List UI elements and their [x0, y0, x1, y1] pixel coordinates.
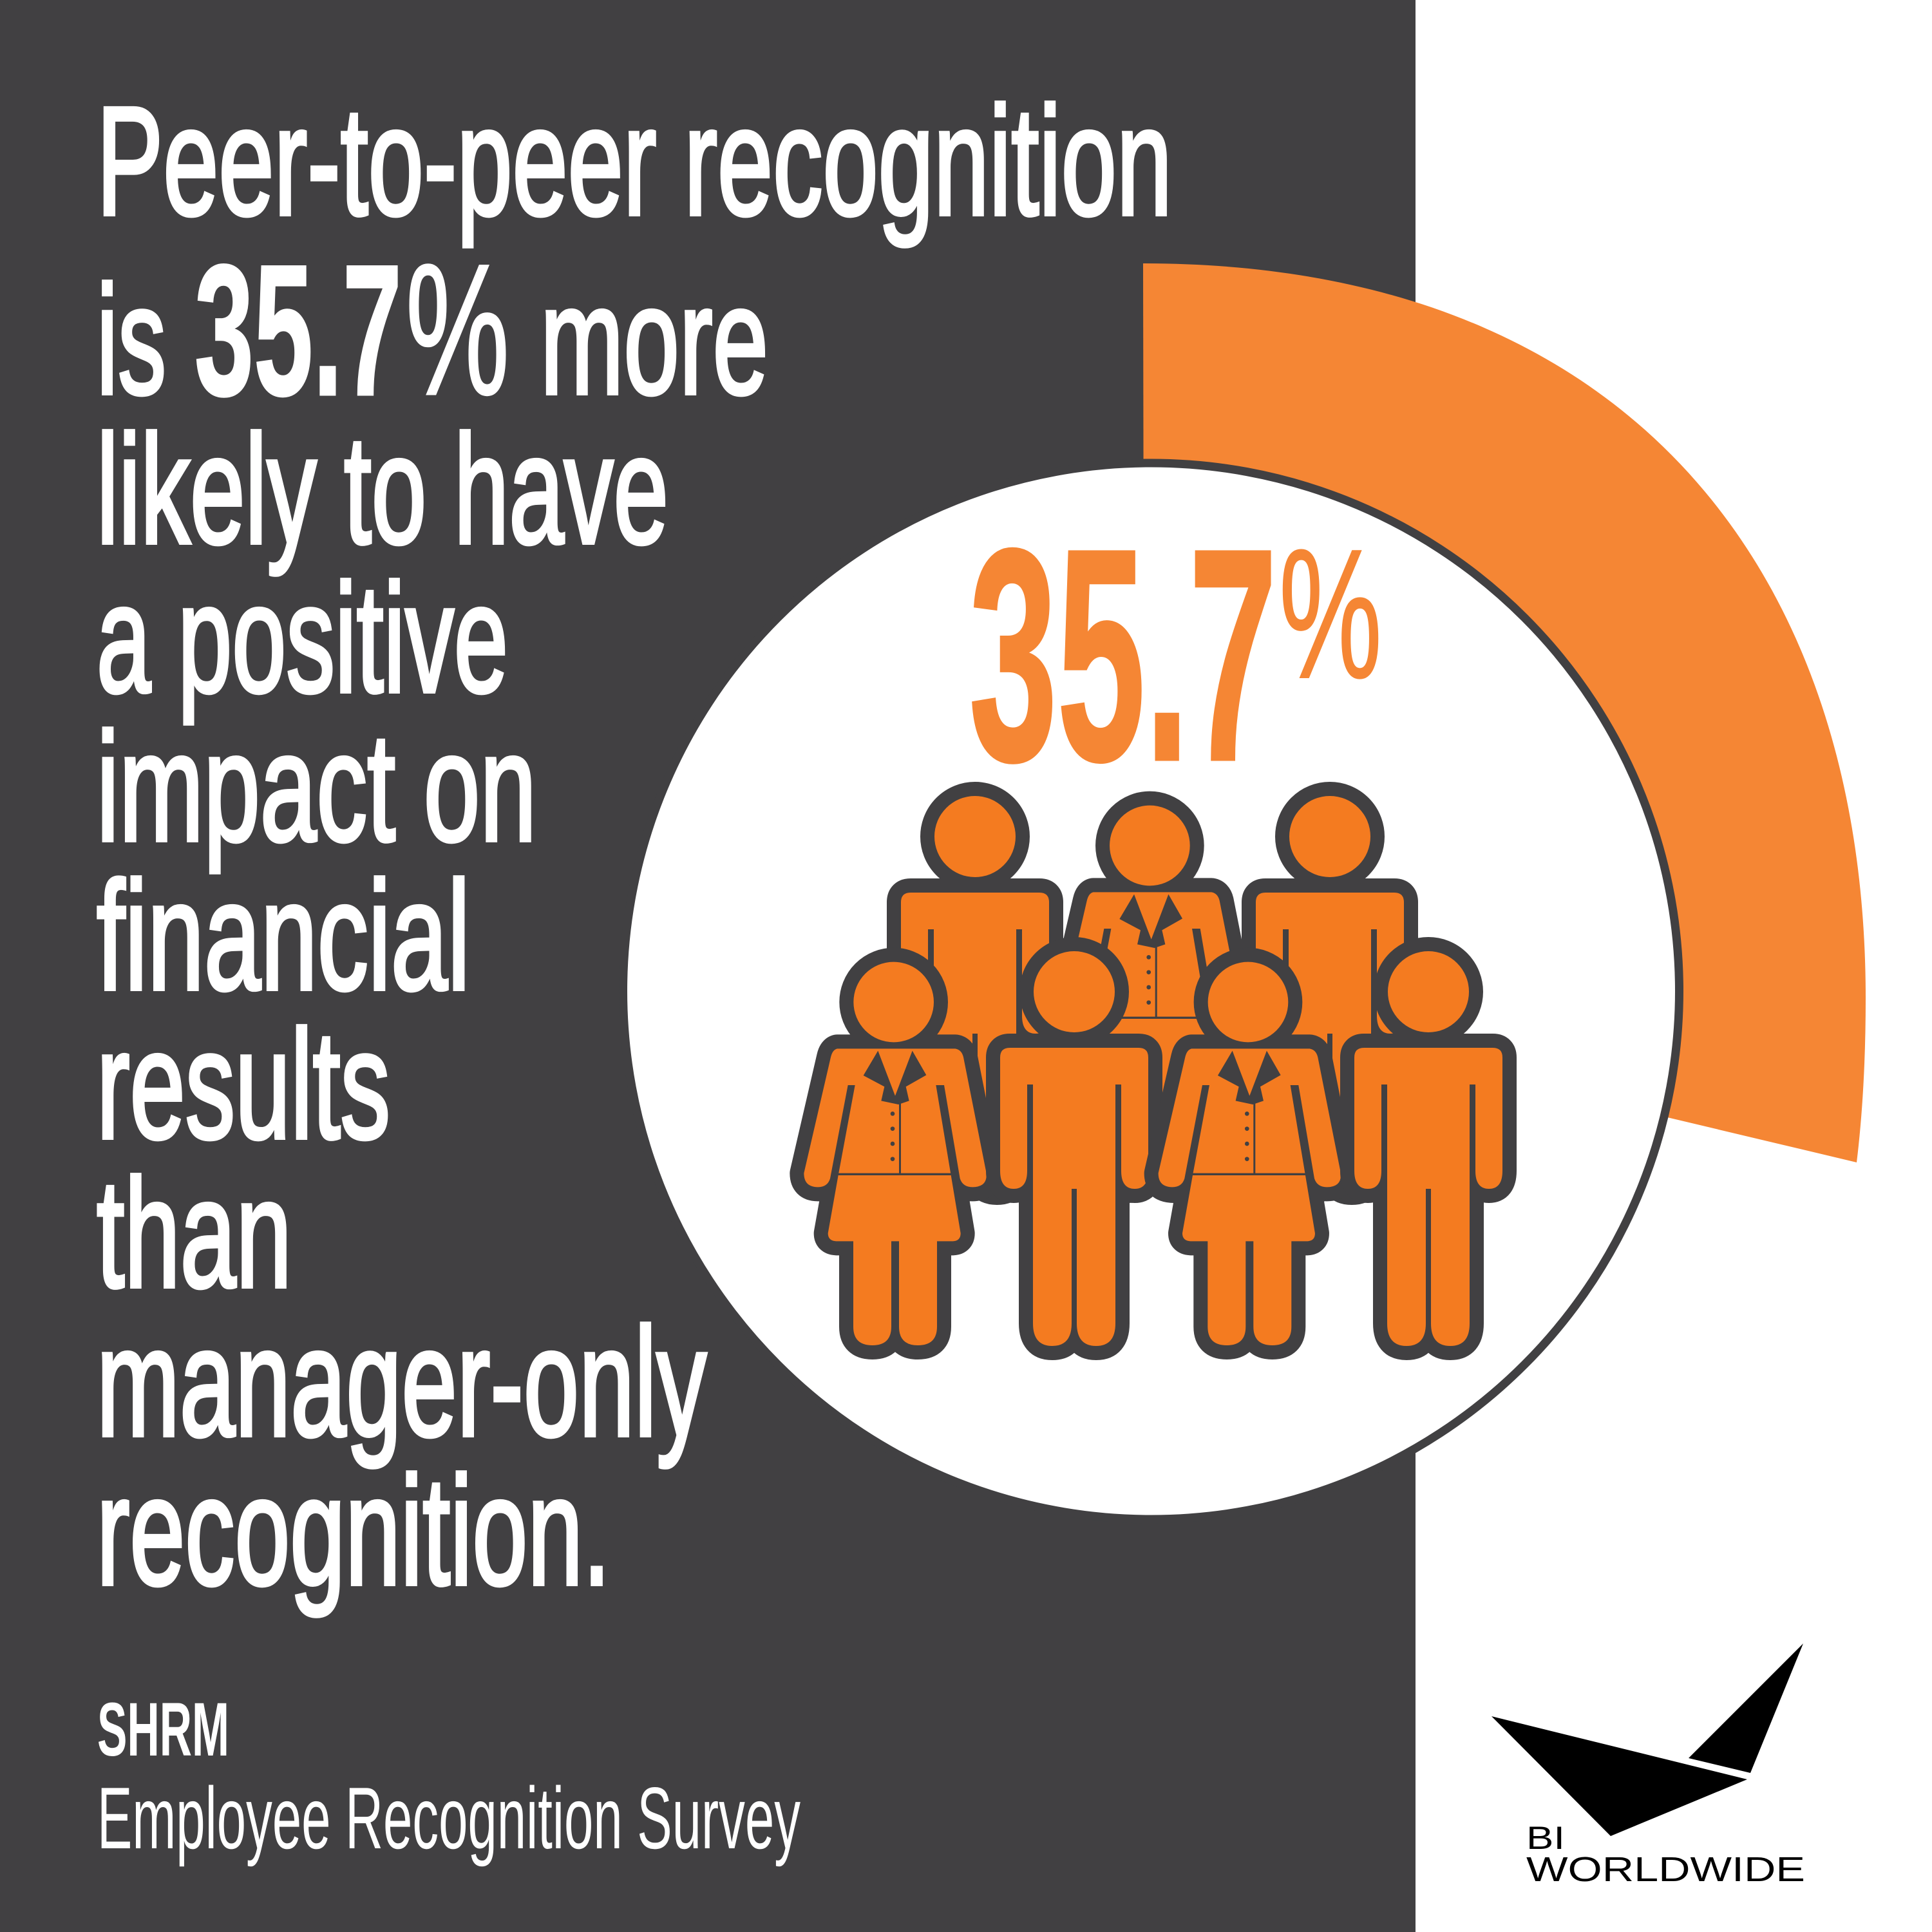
big statistic 35.7%: 35.7	[969, 487, 1277, 824]
orange arc segment	[1143, 263, 1866, 1162]
dark background panel	[0, 0, 1416, 1932]
source: SHRM: SHRM	[97, 1687, 229, 1772]
heading text: than	[97, 1147, 292, 1320]
heading text: Peer-to-peer recognition	[97, 75, 1172, 247]
BI Worldwide logo	[1492, 1643, 1805, 1889]
front row man right	[1354, 951, 1502, 1346]
front row woman right	[1159, 962, 1341, 1345]
heading text: results	[97, 998, 390, 1171]
heading text	[97, 75, 1172, 1617]
white circle	[623, 463, 1680, 1519]
heading text: financial	[97, 849, 470, 1022]
people group icon	[804, 796, 1502, 1346]
source: survey name: Employee Recognition Survey	[97, 1769, 800, 1867]
front row man left	[1000, 951, 1148, 1346]
back row man left	[901, 796, 1049, 1191]
logo wordmark: BI	[1526, 1820, 1565, 1856]
heading text: manager-only	[97, 1296, 706, 1468]
heading text: is	[97, 254, 166, 426]
heading text: recognition.	[97, 1444, 611, 1617]
heading text: 35.7	[194, 226, 402, 435]
heading text: %	[406, 225, 509, 434]
front row woman left	[804, 962, 987, 1345]
heading text: more	[540, 254, 768, 426]
heading text: a positive	[97, 552, 508, 724]
logo mark	[1492, 1643, 1803, 1836]
heading text: impact on	[97, 701, 536, 873]
big statistic 35.7%: %	[1279, 511, 1382, 717]
heading text: likely to have	[97, 403, 668, 576]
back row man right	[1256, 796, 1404, 1191]
logo wordmark	[1526, 1820, 1805, 1889]
logo wordmark: WORLDWIDE	[1526, 1850, 1805, 1889]
back row woman	[1060, 806, 1242, 1189]
